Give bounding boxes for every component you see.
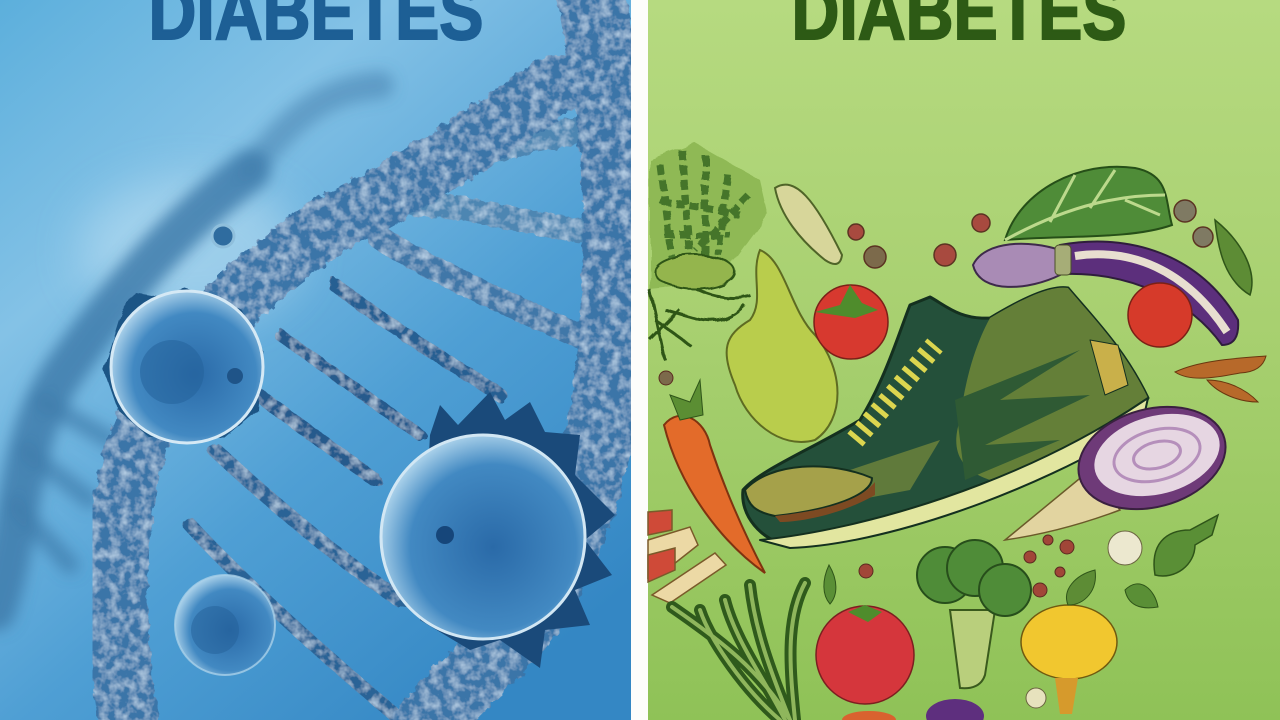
beans right	[1175, 356, 1266, 402]
carrot	[664, 380, 765, 573]
yellow apple	[1021, 570, 1117, 714]
small green leaves	[824, 565, 1158, 608]
cell: large right	[381, 392, 615, 668]
small leaf right	[1215, 220, 1252, 295]
leafy greens	[650, 143, 768, 360]
small floating cell	[212, 225, 234, 247]
leek bundle	[672, 583, 805, 720]
eggplant	[973, 242, 1238, 345]
sliced roots lower-left	[648, 510, 726, 603]
herb sprig right	[1154, 515, 1218, 576]
blurred background DNA helix	[0, 85, 380, 610]
divider	[631, 0, 648, 720]
running shoe	[743, 288, 1148, 548]
red tomato right	[1128, 283, 1192, 347]
garlic bulb	[1108, 531, 1142, 565]
panel: genetics background	[0, 0, 631, 720]
broccoli	[917, 540, 1031, 688]
tomato lower	[816, 605, 914, 704]
green pear-shaped squash	[727, 250, 838, 442]
tomato small	[814, 285, 888, 359]
cell: upper left	[104, 288, 263, 443]
onion	[1005, 391, 1237, 540]
DNA rungs	[190, 130, 600, 715]
DNA main strands	[118, 0, 617, 720]
parsnip	[775, 185, 842, 264]
small seeds and berries lower	[659, 371, 1074, 597]
small berries upper	[848, 200, 1213, 268]
cell: lower left	[175, 575, 275, 675]
panel: lifestyle background	[648, 0, 1280, 720]
spinach leaf	[1005, 167, 1172, 240]
bottom vegetables	[842, 688, 1046, 720]
